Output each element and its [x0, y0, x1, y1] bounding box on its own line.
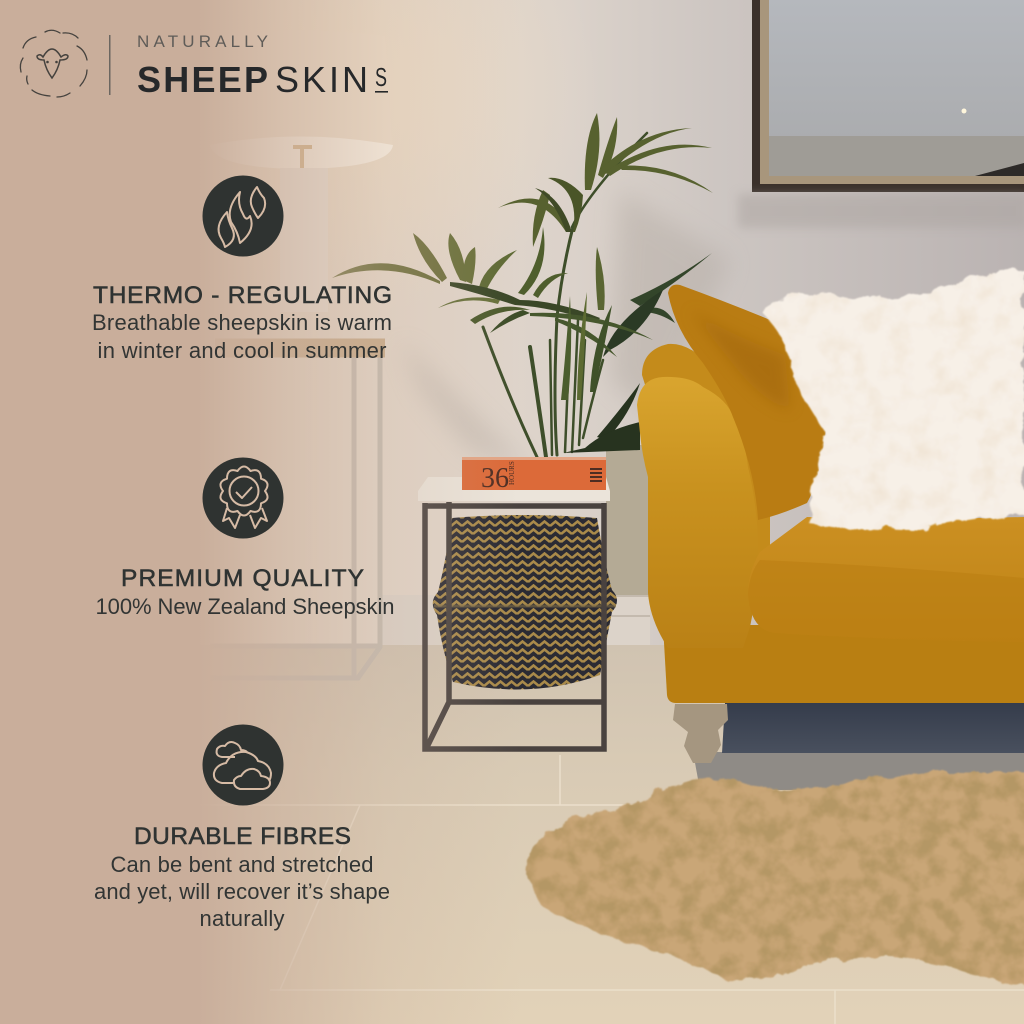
mirror shadow [738, 194, 1024, 228]
table frame [425, 502, 604, 749]
description: Can be bent and stretched [110, 852, 374, 877]
sheepskin rug [528, 773, 1024, 990]
heading: DURABLE FIBRES [134, 823, 351, 850]
wooden sofa leg [673, 704, 728, 763]
palm upper frond [498, 113, 713, 247]
wall behind plant under sofa arm [606, 445, 650, 595]
side table with book [418, 457, 610, 749]
book: HOURS [508, 461, 516, 485]
palm plant [332, 113, 713, 457]
description: Breathable sheepskin is warm [92, 310, 392, 335]
logo: NATURALLY: NATURALLY [137, 32, 268, 51]
basket [433, 515, 617, 690]
back console table [210, 348, 385, 680]
feature: thermo-regulating [92, 176, 392, 363]
description: and yet, will recover it’s shape [94, 879, 390, 904]
feature: premium quality [96, 458, 394, 619]
description: in winter and cool in summer [98, 338, 386, 363]
icon: heat waves [202, 176, 284, 256]
logo emblem: sheep [20, 30, 87, 97]
palm right frond [530, 247, 712, 400]
palm stems [483, 133, 647, 457]
wall [0, 0, 1024, 650]
book: 36 [481, 463, 509, 494]
cushion fold shade [690, 310, 790, 410]
skirting board [380, 595, 650, 645]
icon: clouds [202, 724, 284, 806]
heading: THERMO - REGULATING [93, 282, 392, 309]
feature: durable fibres [94, 724, 390, 931]
description [92, 310, 392, 363]
icon: rosette badge [202, 458, 284, 538]
palm left frond [332, 227, 600, 333]
description: naturally [200, 906, 284, 931]
heading: PREMIUM QUALITY [121, 565, 364, 592]
mirror [752, 0, 1024, 192]
logo [20, 30, 388, 100]
logo divider [109, 35, 110, 95]
sofa arm [637, 377, 758, 648]
sofa [637, 344, 1024, 790]
mustard cushion [668, 285, 826, 520]
book [462, 457, 606, 494]
floor shadow zone [693, 752, 1024, 790]
sofa back [642, 344, 770, 560]
table lamp [210, 30, 393, 312]
description: 100% New Zealand Sheepskin [96, 594, 394, 619]
wall plant shadows [400, 190, 730, 470]
left colour fade panel [0, 0, 520, 1024]
marble table top [418, 477, 610, 501]
floor [0, 645, 1024, 1024]
shadow under sofa [722, 703, 1024, 753]
seat shade [748, 560, 1024, 642]
floor tile joints [200, 755, 1024, 1024]
sofa base [663, 625, 1024, 703]
logo: SHEEP: SHEEP [137, 59, 268, 100]
description [94, 852, 390, 931]
lamp glow on wall [60, 0, 600, 320]
logo: small S: S [375, 62, 387, 92]
logo: SKIN: SKIN [275, 59, 368, 100]
sofa seat cushion [748, 517, 1024, 642]
white fur pillow [762, 270, 1024, 530]
palm lower dark leaves [563, 383, 640, 453]
